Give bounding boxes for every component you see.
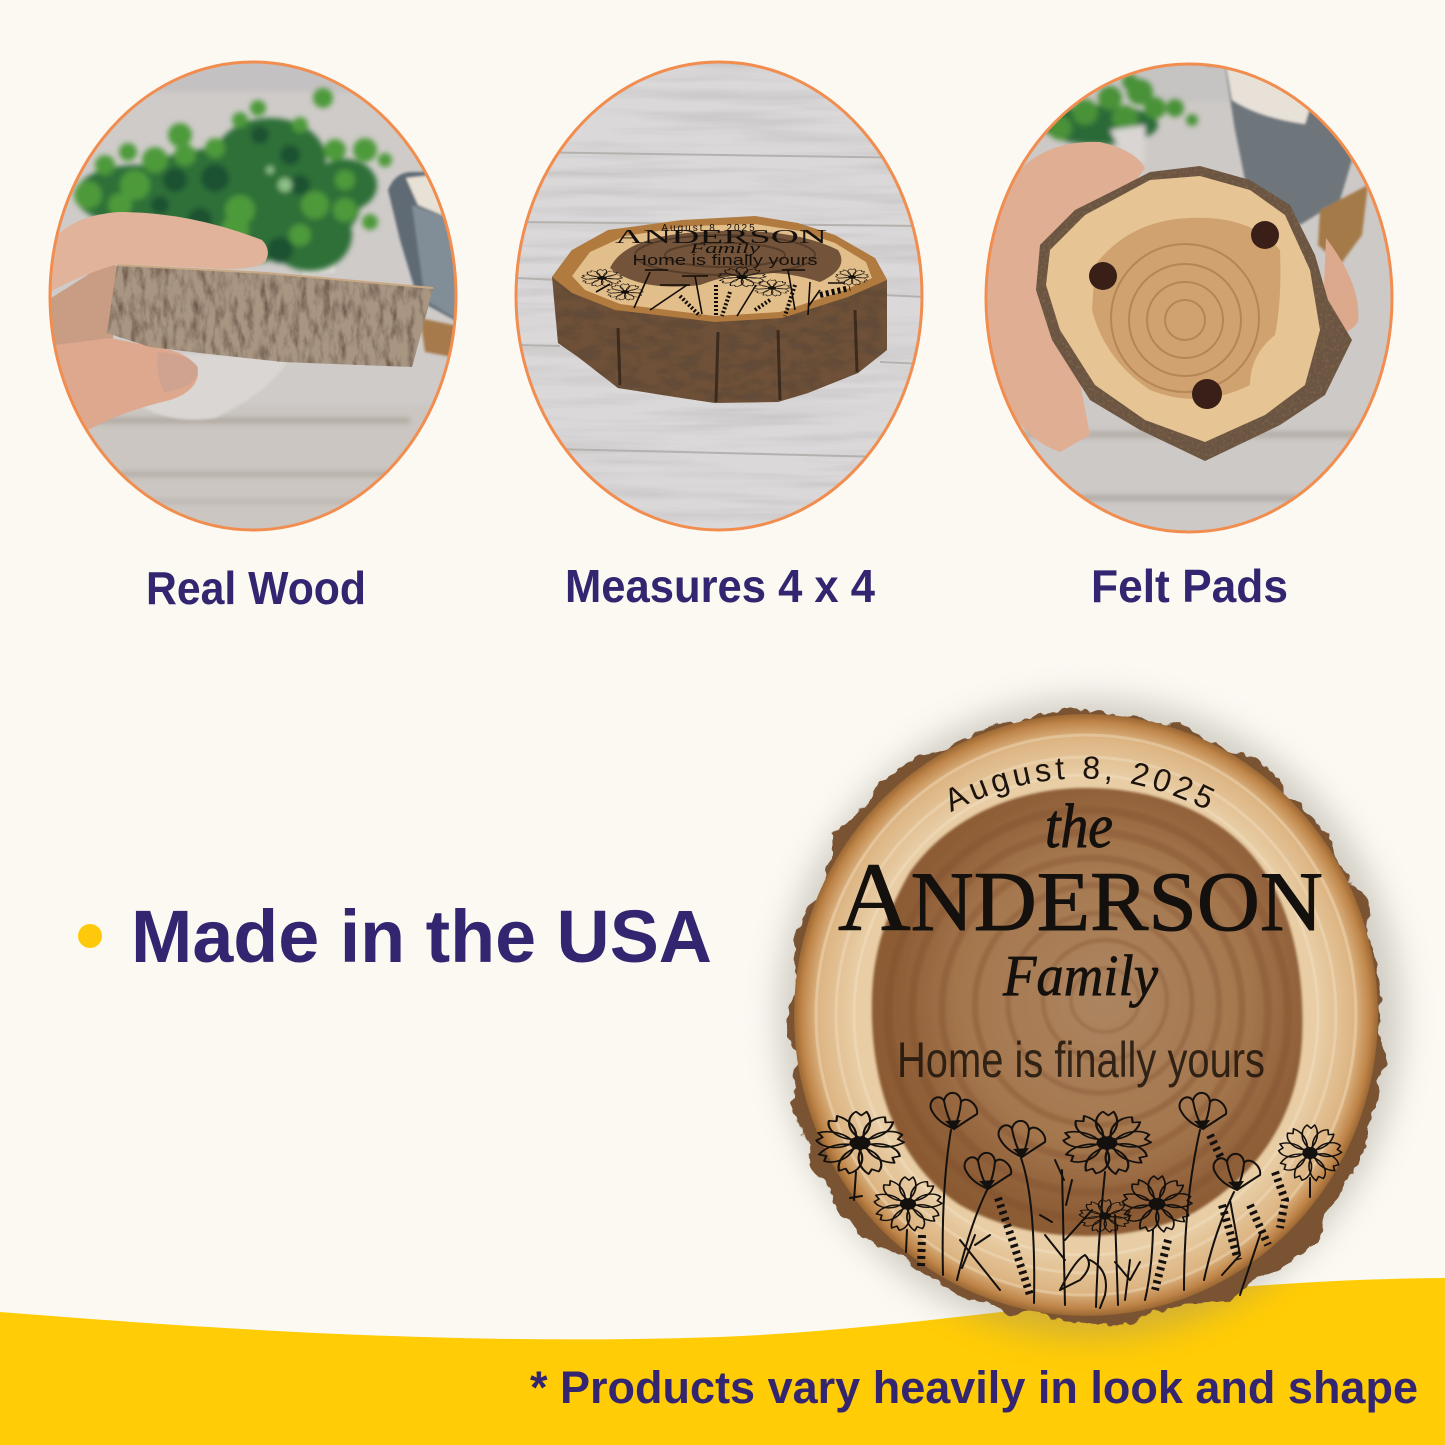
panel: real wood photo [48,60,460,535]
yellow wave band [0,1278,1445,1445]
panel border [986,64,1392,532]
large engraved coaster [764,684,1416,1351]
icon: grey mug [388,172,458,358]
engraved tagline: Home is finally yours [897,1032,1265,1088]
caption: real wood: Real Wood [146,562,366,614]
caption: felt pads: Felt Pads [1091,560,1288,612]
panel border [516,62,922,530]
icon: bark side of coaster [552,250,887,403]
icon: green plant [74,88,392,271]
coaster small engraving text: August 8, 2025 [661,223,757,234]
coaster small engraving text [615,223,827,269]
panel: felt pads photo [984,60,1395,534]
panel border [50,62,456,530]
icon: wood slice back [1036,166,1352,461]
engraved anderson: ANDERSON [838,844,1323,952]
coaster heartwood [872,788,1303,1236]
footnote: * Products vary heavily in look and shape [530,1362,1418,1413]
icon: coaster top face [552,216,887,322]
icon: grey mug [1207,60,1368,265]
sapwood rings [816,735,1356,1295]
icon: blurred plant [1042,74,1198,165]
growth rings [888,810,1288,1218]
coaster shadow [778,698,1402,1338]
panel: measures photo [515,60,925,532]
engraved family: Family [1002,943,1158,1008]
icon: hand fingers [52,265,117,345]
heading: made in the usa: Made in the USA [131,895,712,978]
engraved the: the [1045,793,1113,861]
coaster bark edge [787,706,1386,1324]
coaster small engraving text: Family [688,241,761,257]
engraved wildflowers [815,1093,1342,1308]
caption: measures: Measures 4 x 4 [565,560,875,612]
bullet marker [78,924,102,948]
engraved date: August 8, 2025 [950,756,1214,812]
small flower engraving [581,267,869,316]
icon: wood slice side view [107,265,433,367]
icon: felt pads [1089,221,1279,409]
coaster sapwood [794,714,1378,1316]
coaster small engraving text: ANDERSON [615,226,827,248]
coaster small engraving text: Home is finally yours [632,252,818,269]
icon: hand [984,142,1145,452]
icon: white pot [144,264,336,420]
